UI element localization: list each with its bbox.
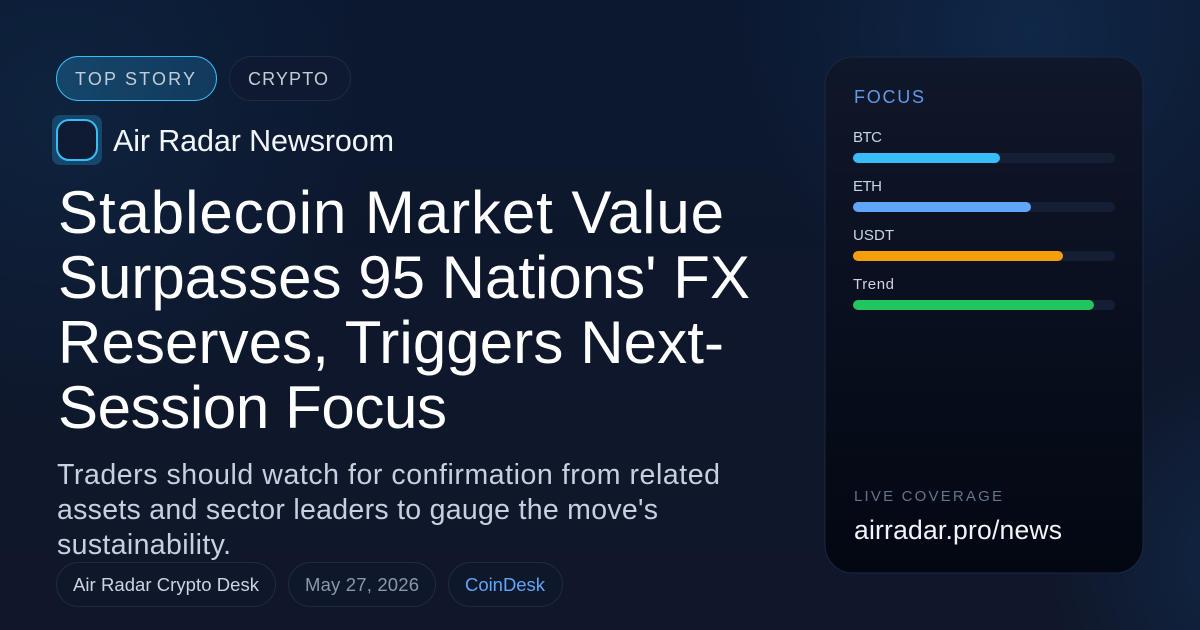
title — [58, 179, 750, 441]
bar: BTC: BTC — [853, 129, 882, 146]
bar: USDT — [853, 227, 1115, 261]
meta pill: date — [288, 562, 436, 606]
live coverage label: LIVE COVERAGE — [854, 488, 1002, 505]
bar: ETH: ETH — [853, 178, 882, 195]
bar: Trend — [853, 276, 1115, 310]
bar: Trend: Trend — [853, 276, 894, 293]
meta pill: desk: Air Radar Crypto Desk — [73, 574, 260, 595]
subtitle — [57, 459, 720, 561]
focus heading: FOCUS — [854, 87, 924, 107]
title: Surpasses 95 Nations' FX — [58, 244, 750, 311]
title: Session Focus — [58, 374, 447, 441]
meta pill: source — [448, 562, 562, 606]
tag: top story — [56, 56, 216, 100]
coverage url: airradar.pro/news — [854, 515, 1062, 545]
subtitle: assets and sector leaders to gauge the move's — [57, 494, 658, 526]
subtitle: sustainability. — [57, 529, 231, 561]
panel: focus — [825, 57, 1143, 573]
bar: USDT: USDT — [853, 227, 894, 244]
subtitle: Traders should watch for confirmation from related — [57, 459, 720, 491]
meta pill: date: May 27, 2026 — [305, 574, 419, 595]
icon: newsroom logo — [52, 115, 102, 165]
title: Reserves, Triggers Next- — [58, 309, 724, 376]
bar: BTC — [853, 129, 1115, 163]
tag: crypto — [230, 56, 350, 100]
meta pill: desk — [56, 562, 276, 606]
title: Stablecoin Market Value — [58, 179, 724, 246]
tag: crypto: CRYPTO — [248, 69, 328, 89]
newsroom name: Air Radar Newsroom — [113, 124, 394, 158]
tag: top story: TOP STORY — [75, 69, 195, 89]
meta pill: source: CoinDesk — [465, 574, 546, 595]
bar: ETH — [853, 178, 1115, 212]
